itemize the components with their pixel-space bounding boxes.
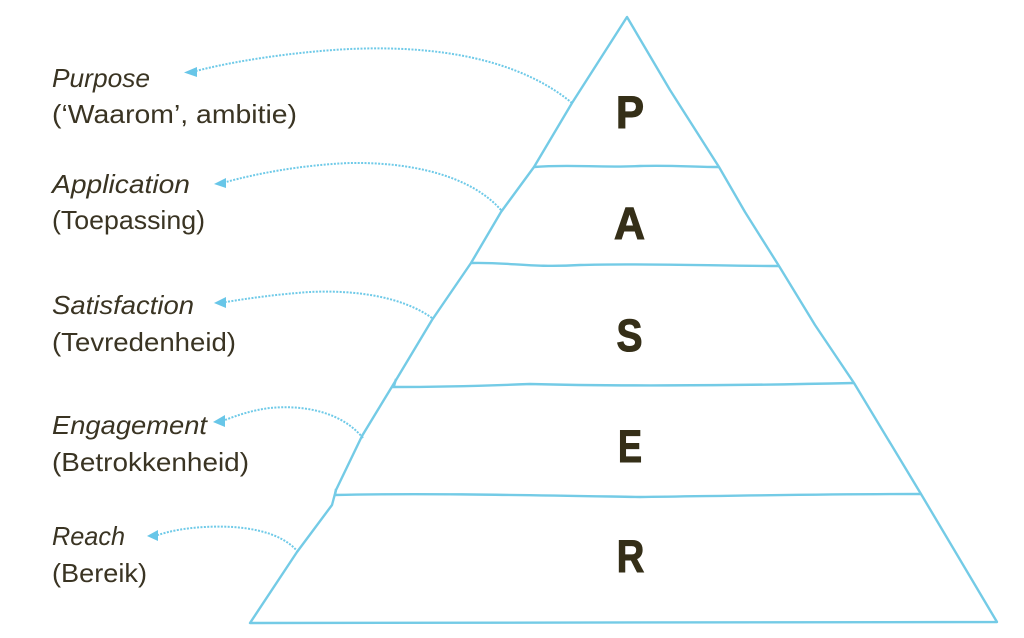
arrow: Purpose xyxy=(184,48,572,103)
label: Reach xyxy=(52,521,147,588)
arrow: Engagement xyxy=(213,407,363,438)
label: Purpose: Purpose xyxy=(52,63,150,93)
label: Purpose: (‘Waarom’, ambitie) xyxy=(52,99,297,129)
label: Reach: Reach xyxy=(52,521,125,551)
label: Engagement: Engagement xyxy=(52,410,209,440)
tier divider: P/A xyxy=(534,166,719,167)
pyramid outline xyxy=(250,17,997,623)
label: Reach: (Bereik) xyxy=(52,558,147,588)
pyramid letter S: S xyxy=(616,310,642,361)
tier divider: A/S xyxy=(471,263,779,266)
arrow: Reach xyxy=(147,527,298,552)
label: Engagement xyxy=(52,410,249,477)
pyramid letter E: E xyxy=(618,421,642,472)
label: Engagement: (Betrokkenheid) xyxy=(52,447,249,477)
arrow: Application xyxy=(214,163,501,210)
label: Application xyxy=(50,169,205,235)
outline notches xyxy=(335,379,396,495)
arrow: Satisfaction xyxy=(214,292,432,318)
pyramid letter R: R xyxy=(617,531,644,582)
label: Satisfaction xyxy=(52,290,236,357)
pyramid letter P: P xyxy=(616,87,644,138)
pyramid letter A: A xyxy=(614,198,645,249)
tier divider: E/R xyxy=(334,494,921,497)
label: Application: Application xyxy=(50,169,190,199)
label: Application: (Toepassing) xyxy=(52,205,205,235)
label: Satisfaction: (Tevredenheid) xyxy=(52,327,236,357)
tier divider: S/E xyxy=(392,383,854,387)
label: Purpose xyxy=(52,63,297,129)
label: Satisfaction: Satisfaction xyxy=(52,290,194,320)
